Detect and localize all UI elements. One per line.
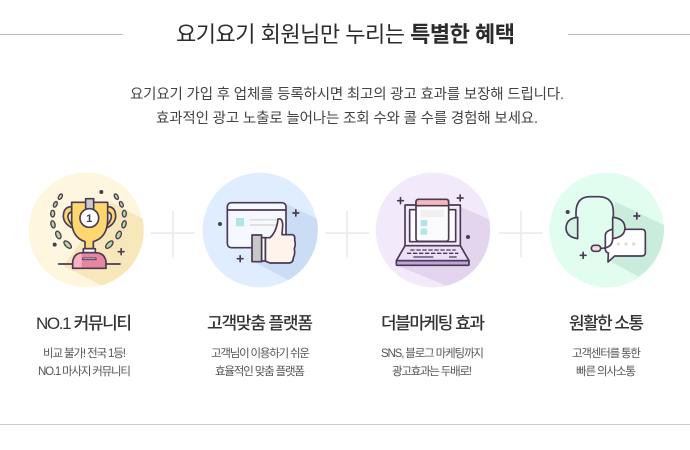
icon: thumbs up on browser — [203, 173, 318, 287]
card text: marketing: 광고효과는 두배로! — [392, 365, 472, 378]
intro text — [130, 86, 564, 127]
card text: communication: 고객센터를 통한 — [572, 347, 641, 360]
card text: platform: 고객님이 이용하기 쉬운 — [211, 346, 310, 360]
card text: community: 비교 불가! 전국 1등! — [43, 347, 126, 360]
icon: trophy: 1 — [86, 213, 92, 225]
card text: community — [38, 347, 131, 378]
card heading: community: NO.1 커뮤니티 — [36, 314, 132, 333]
icon: headset and speech bubble — [549, 173, 664, 287]
card heading: communication: 원활한 소통 — [569, 314, 644, 333]
card text: community: NO.1 마사지 커뮤니티 — [38, 365, 131, 378]
card heading: marketing: 더블마케팅 효과 — [381, 314, 485, 333]
card text: communication: 빠른 의사소통 — [576, 365, 636, 378]
icon: laptop — [376, 173, 490, 287]
intro text: 효과적인 광고 노출로 늘어나는 조회 수와 콜 수를 경험해 보세요. — [156, 110, 538, 127]
title: 요기요기 회원님만 누리는 특별한 혜택 — [176, 22, 515, 47]
card text: marketing — [381, 347, 484, 378]
icon: trophy — [29, 173, 144, 287]
card text: communication — [572, 347, 641, 378]
card text: platform — [211, 346, 310, 378]
card heading: platform: 고객맞춤 플랫폼 — [207, 314, 313, 333]
intro text: 요기요기 가입 후 업체를 등록하시면 최고의 광고 효과를 보장해 드립니다. — [130, 86, 564, 103]
card text: marketing: SNS, 블로그 마케팅까지 — [381, 347, 484, 360]
card text: platform: 효율적인 맞춤 플랫폼 — [215, 365, 305, 378]
